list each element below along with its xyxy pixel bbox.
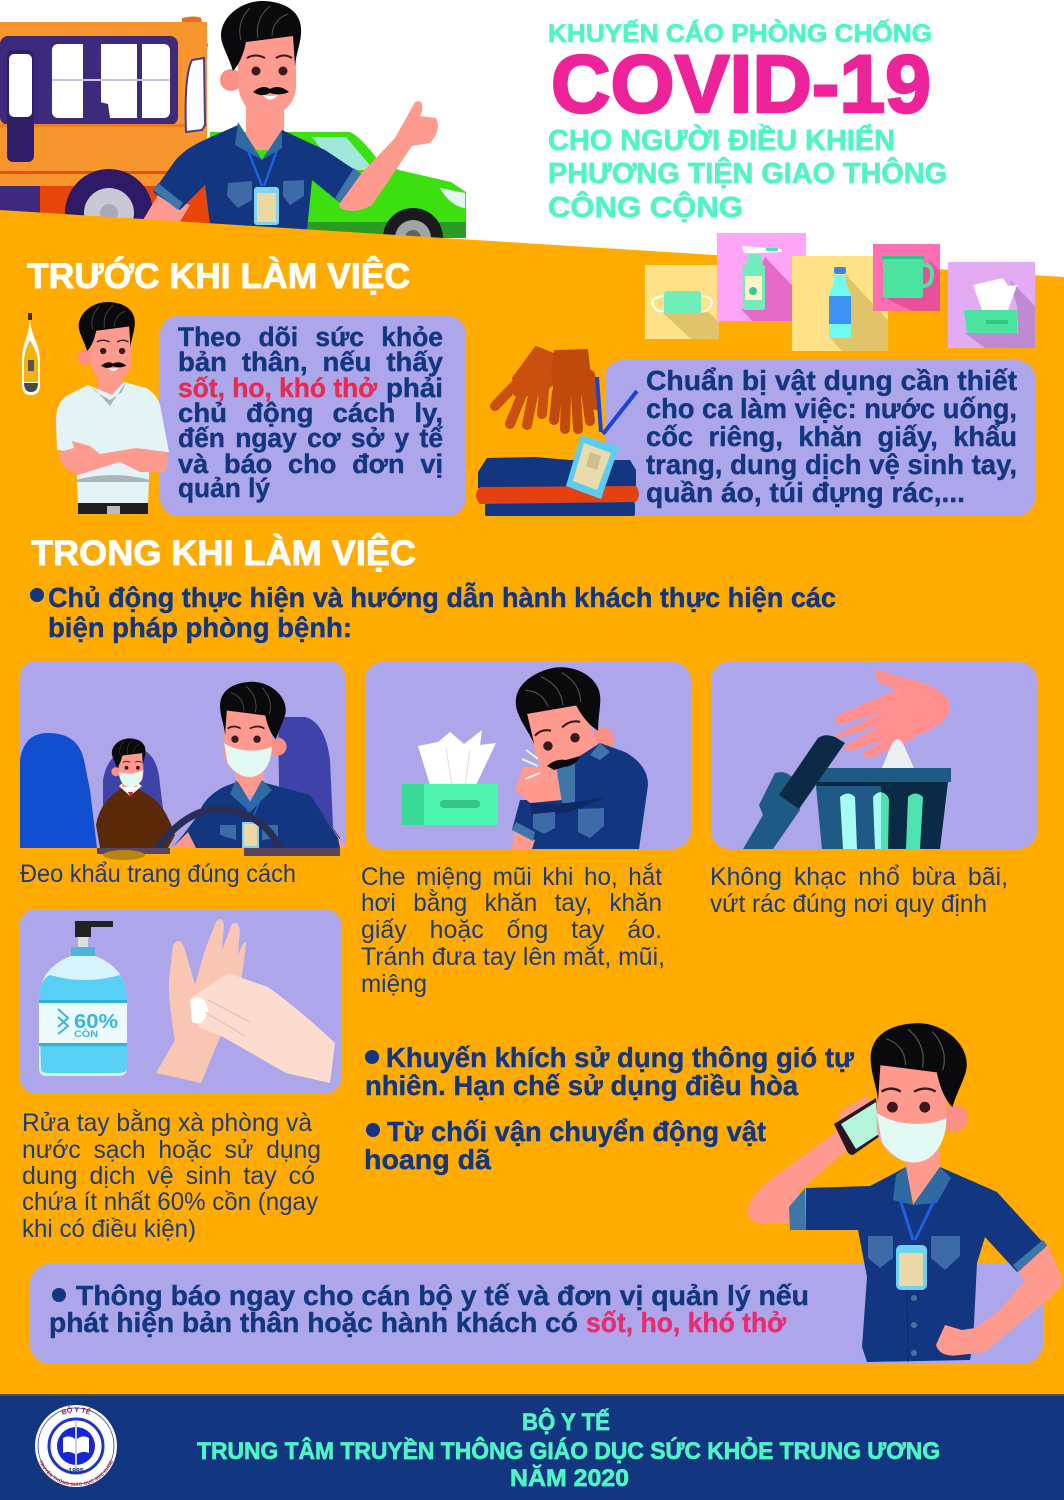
logo: Ministry of Health emblem: TRUYỀN THÔNG GIÁO DỤC SỨC KHỎE	[40, 1460, 113, 1486]
caption: wash hands: Rửa tay bằng xà phòng và	[22, 1108, 312, 1137]
caption: cover cough: miệng	[361, 970, 427, 998]
card: water bottle	[792, 256, 888, 351]
illustration: bus	[0, 16, 220, 257]
item cards	[645, 233, 1035, 351]
title block: KHUYẾN CÁO PHÒNG CHỐNG	[548, 18, 932, 48]
bullet: refuse wild animals: hoang dã	[364, 1144, 491, 1175]
panel text: bản thân, nếu thấy	[178, 347, 443, 377]
caption: wash hands: khi có điều kiện)	[22, 1215, 196, 1243]
bullet: refuse wild animals: Từ chối vận chuyển động vật	[387, 1116, 766, 1147]
tissue box	[402, 730, 498, 825]
panel text: sốt, ho, khó thở	[178, 373, 377, 403]
caption: cover cough: Che miệng mũi khi ho, hắt	[361, 862, 662, 891]
title: COVID-19: COVID-19	[551, 39, 931, 130]
sanitiser bottle	[39, 921, 127, 1076]
panel text	[49, 1280, 809, 1338]
panel text: Thông báo ngay cho cán bộ y tế và đơn vị quản lý nếu	[76, 1280, 809, 1311]
right arm and hand on hip	[936, 1245, 1063, 1356]
illustration: green car	[210, 132, 466, 268]
footer text: NĂM 2020	[510, 1464, 629, 1492]
panel text: đến ngay cơ sở y tế	[178, 423, 443, 453]
caption: cover cough: Tránh đưa tay lên mắt, mũi,	[361, 942, 665, 971]
footer text	[197, 1408, 940, 1492]
panel: dispose rubbish	[711, 662, 1037, 849]
panel text: quản lý	[178, 473, 270, 503]
left glove	[495, 347, 554, 425]
caption: cover cough	[361, 862, 665, 998]
illustration: gloves, uniform and badge	[476, 347, 639, 516]
figure: driver on phone	[748, 1023, 1063, 1362]
logo: Ministry of Health emblem: BỘ Y TẾ	[61, 1406, 92, 1415]
icon: thermometer	[22, 313, 40, 395]
bin	[816, 768, 951, 849]
steering wheel	[157, 809, 280, 848]
panel text: trang, dung dịch vệ sinh tay,	[646, 449, 1017, 480]
card: cup	[873, 244, 940, 311]
bullet: natural ventilation: nhiên. Hạn chế sử dụng điều hòa	[365, 1070, 798, 1101]
caption: wash hands: chứa ít nhất 60% cồn (ngay	[22, 1188, 318, 1216]
bullet: refuse wild animals	[364, 1116, 766, 1175]
bullet: natural ventilation	[365, 1042, 855, 1101]
tissue in bin	[882, 739, 914, 768]
card: tissue box	[948, 262, 1035, 348]
panel: notify medical staff	[30, 1264, 1043, 1364]
caption: wear mask: Đeo khẩu trang đúng cách	[20, 860, 296, 888]
panel text	[178, 322, 443, 503]
panel text: phải	[386, 373, 443, 403]
arm and hand holding phone	[748, 1095, 880, 1224]
title block	[548, 18, 947, 224]
footer text: BỘ Y TẾ	[522, 1408, 610, 1436]
caption: cover cough: hơi bằng khăn tay, khăn	[361, 888, 662, 917]
panel text: cốc riêng, khăn giấy, khẩu	[646, 421, 1017, 452]
panel text: và báo cho đơn vị	[178, 449, 443, 479]
logo: Ministry of Health emblem: 1985	[68, 1468, 84, 1475]
shirt	[806, 1167, 1048, 1362]
passenger	[96, 738, 175, 848]
sanitiser bottle: CỒN	[74, 1028, 98, 1039]
panel text: Chuẩn bị vật dụng cần thiết	[646, 365, 1017, 396]
title block: PHƯƠNG TIỆN GIAO THÔNG	[548, 156, 947, 190]
caption: cover cough: giấy hoặc ống tay áo.	[361, 916, 662, 944]
title block: CÔNG CỘNG	[548, 190, 743, 224]
right glove	[552, 350, 596, 429]
panel: wear mask	[20, 661, 346, 860]
dashboard	[97, 848, 340, 860]
panel text: quần áo, túi đựng rác,...	[646, 477, 965, 508]
panel: cover cough	[365, 656, 691, 849]
panel text: chủ động cách ly,	[178, 398, 443, 428]
hand	[835, 670, 950, 758]
footer band	[0, 1394, 1064, 1500]
heading: during work: TRONG KHI LÀM VIỆC	[31, 533, 416, 573]
panel text	[646, 365, 1017, 508]
caption: dispose rubbish: vứt rác đúng nơi quy định	[710, 890, 987, 918]
bullet: proactive measures	[30, 582, 836, 643]
driver	[172, 682, 346, 848]
caption: wash hands: dung dịch vệ sinh tay có	[22, 1162, 315, 1190]
caption: dispose rubbish: Không khạc nhổ bừa bãi,	[710, 863, 1008, 891]
figure: man with folded arms	[56, 302, 169, 514]
sanitiser bottle: 60%	[74, 1011, 118, 1033]
bullet: proactive measures: biện pháp phòng bệnh:	[48, 612, 352, 643]
panel text: Theo dõi sức khỏe	[178, 322, 443, 352]
panel: self-monitoring	[160, 316, 466, 516]
seat: left	[20, 733, 97, 848]
bin lid	[743, 735, 845, 849]
panel text: sốt, ho, khó thở	[586, 1307, 786, 1338]
illustration: driver with thumbs up	[143, 1, 438, 240]
card: face mask	[645, 265, 719, 339]
neck	[905, 1150, 940, 1207]
caption: wash hands	[22, 1108, 321, 1243]
seat: passenger	[103, 748, 168, 848]
logo: Ministry of Health emblem	[35, 1405, 117, 1487]
card: hand sanitiser spray	[717, 233, 806, 321]
footer text: TRUNG TÂM TRUYỀN THÔNG GIÁO DỤC SỨC KHỎE TRUNG ƯƠNG	[197, 1436, 940, 1465]
panel text: cho ca làm việc: nước uống,	[646, 393, 1017, 424]
caption: dispose rubbish	[710, 863, 1008, 918]
panel text: phát hiện bản thân hoặc hành khách có	[49, 1307, 578, 1338]
panel: wash hands	[19, 909, 342, 1094]
title block: CHO NGƯỜI ĐIỀU KHIỂN	[548, 123, 895, 157]
phone	[834, 1098, 880, 1155]
washing hands	[156, 919, 335, 1083]
bullet: natural ventilation: Khuyến khích sử dụng thông gió tự	[386, 1042, 855, 1073]
heading: before work: TRƯỚC KHI LÀM VIỆC	[27, 256, 410, 296]
caption: wash hands: nước sạch hoặc sử dụng	[22, 1136, 321, 1164]
panel: prepare items	[605, 360, 1035, 516]
bullet: proactive measures: Chủ động thực hiện và hướng dẫn hành khách thực hiện các	[48, 582, 836, 613]
seat: driver	[278, 717, 334, 848]
man coughing into sleeve	[508, 656, 648, 849]
